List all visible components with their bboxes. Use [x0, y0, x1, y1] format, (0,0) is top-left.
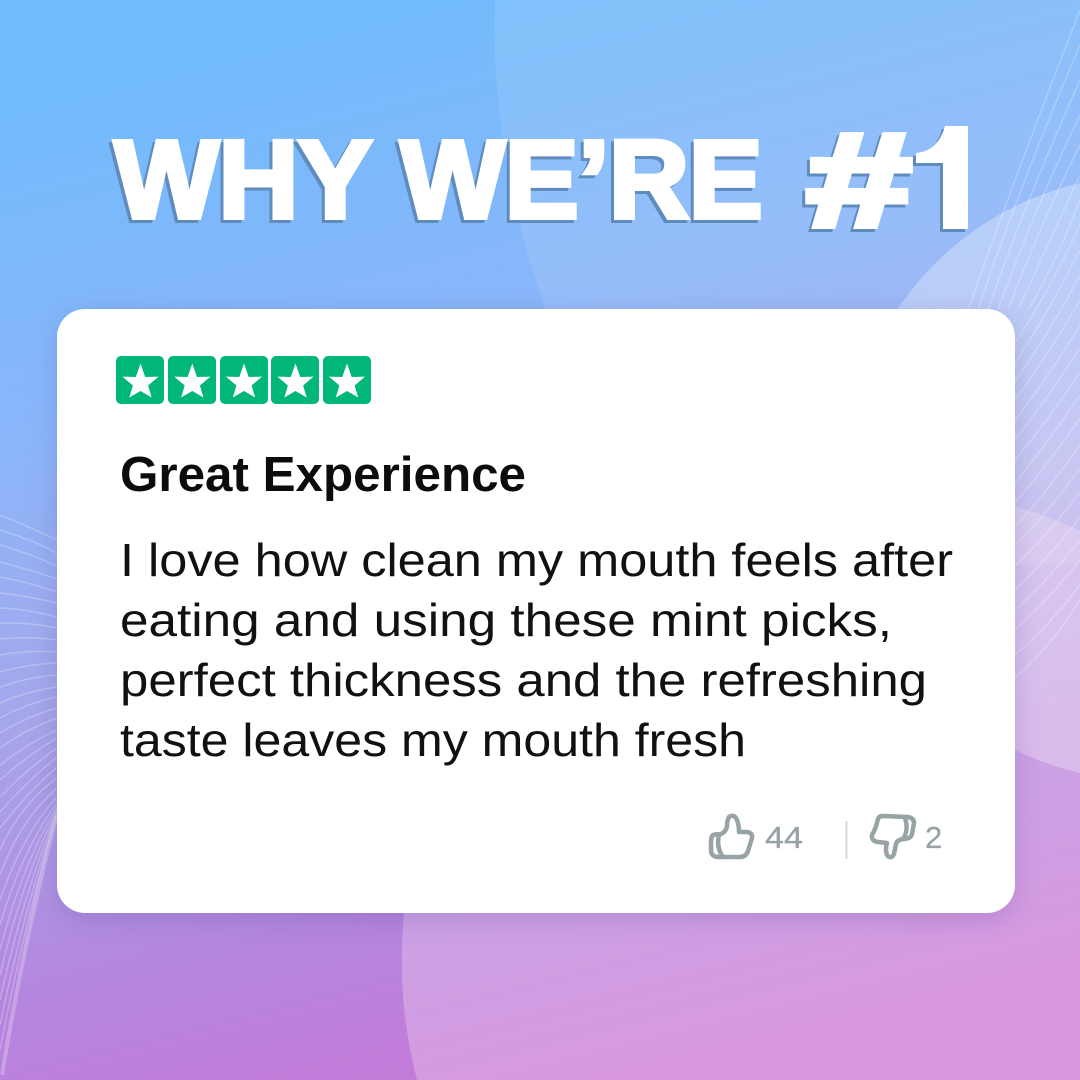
review body text: taste leaves my mouth fresh — [120, 714, 746, 766]
review body text: eating and using these mint picks, — [120, 594, 892, 646]
title: WHY WE'RE #1: # — [807, 106, 911, 254]
icon: thumbs down — [872, 816, 914, 857]
title: WHY WE'RE #1 — [108, 126, 968, 232]
count: 2 dislikes: 2 — [925, 820, 942, 855]
review body text: perfect thickness and the refreshing — [120, 654, 927, 706]
count: 44 likes: 44 — [765, 820, 803, 855]
title: WHY WE'RE #1: WHY WE’RE — [114, 118, 762, 242]
icon: thumbs up — [711, 816, 752, 857]
review heading: Great Experience — [120, 448, 526, 502]
review body text: I love how clean my mouth feels after — [120, 534, 953, 586]
title: WHY WE'RE #1: 1 — [907, 107, 983, 253]
divider — [846, 821, 848, 859]
panel: review card — [57, 309, 1015, 919]
review body text — [120, 534, 953, 766]
icon: five star rating — [116, 356, 371, 404]
